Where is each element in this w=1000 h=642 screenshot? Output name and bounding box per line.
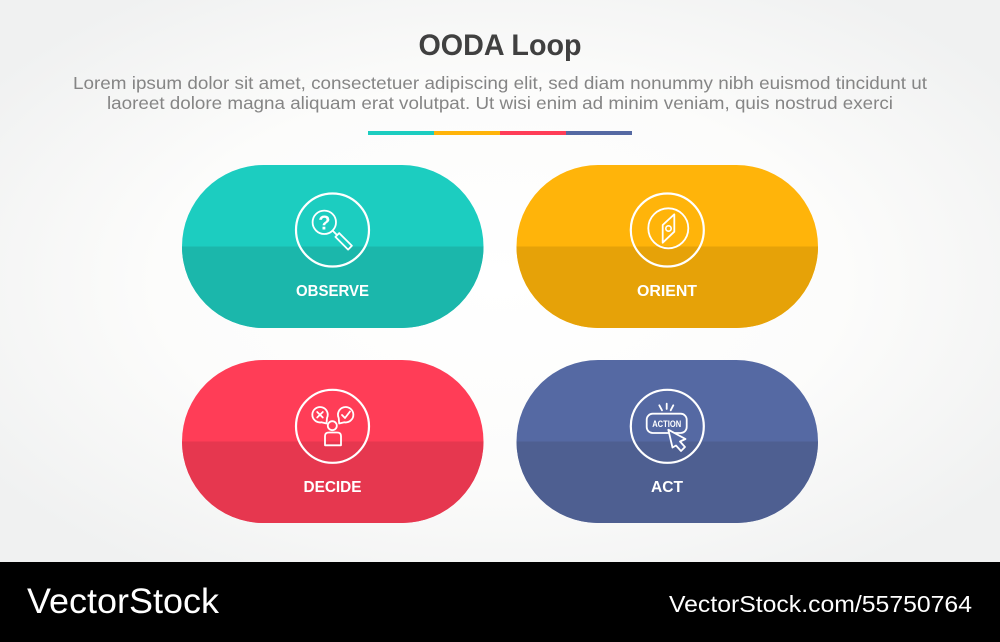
label: act: ACT	[651, 479, 683, 496]
panel: act	[516, 360, 818, 523]
icon: magnifying glass with question mark	[296, 194, 369, 266]
label: orient: ORIENT	[637, 283, 697, 300]
footer url: VectorStock.com/55750764	[669, 591, 972, 617]
description text	[73, 73, 927, 113]
icon: person deciding	[296, 390, 369, 463]
description text: laoreet dolore magna aliquam erat volutpat. Ut wisi enim ad minim veniam, quis nostrud exerci	[107, 93, 893, 113]
panel: decide	[182, 360, 484, 523]
colour divider bar	[368, 131, 632, 135]
icon: compass	[631, 194, 704, 266]
footer bar	[0, 562, 1000, 642]
label: decide: DECIDE	[304, 479, 362, 496]
footer brand: VectorStock	[27, 582, 220, 621]
label: observe: OBSERVE	[296, 283, 369, 300]
panel: observe	[182, 165, 484, 328]
description text: Lorem ipsum dolor sit amet, consectetuer adipiscing elit, sed diam nonummy nibh euismod tincidunt ut	[73, 73, 927, 93]
icon: magnifying glass with question mark: ?	[318, 212, 330, 234]
title: OODA Loop	[418, 29, 582, 62]
icon: action button with cursor: ACTION	[652, 419, 681, 430]
panel: orient	[516, 165, 818, 328]
icon: action button with cursor	[631, 390, 704, 463]
